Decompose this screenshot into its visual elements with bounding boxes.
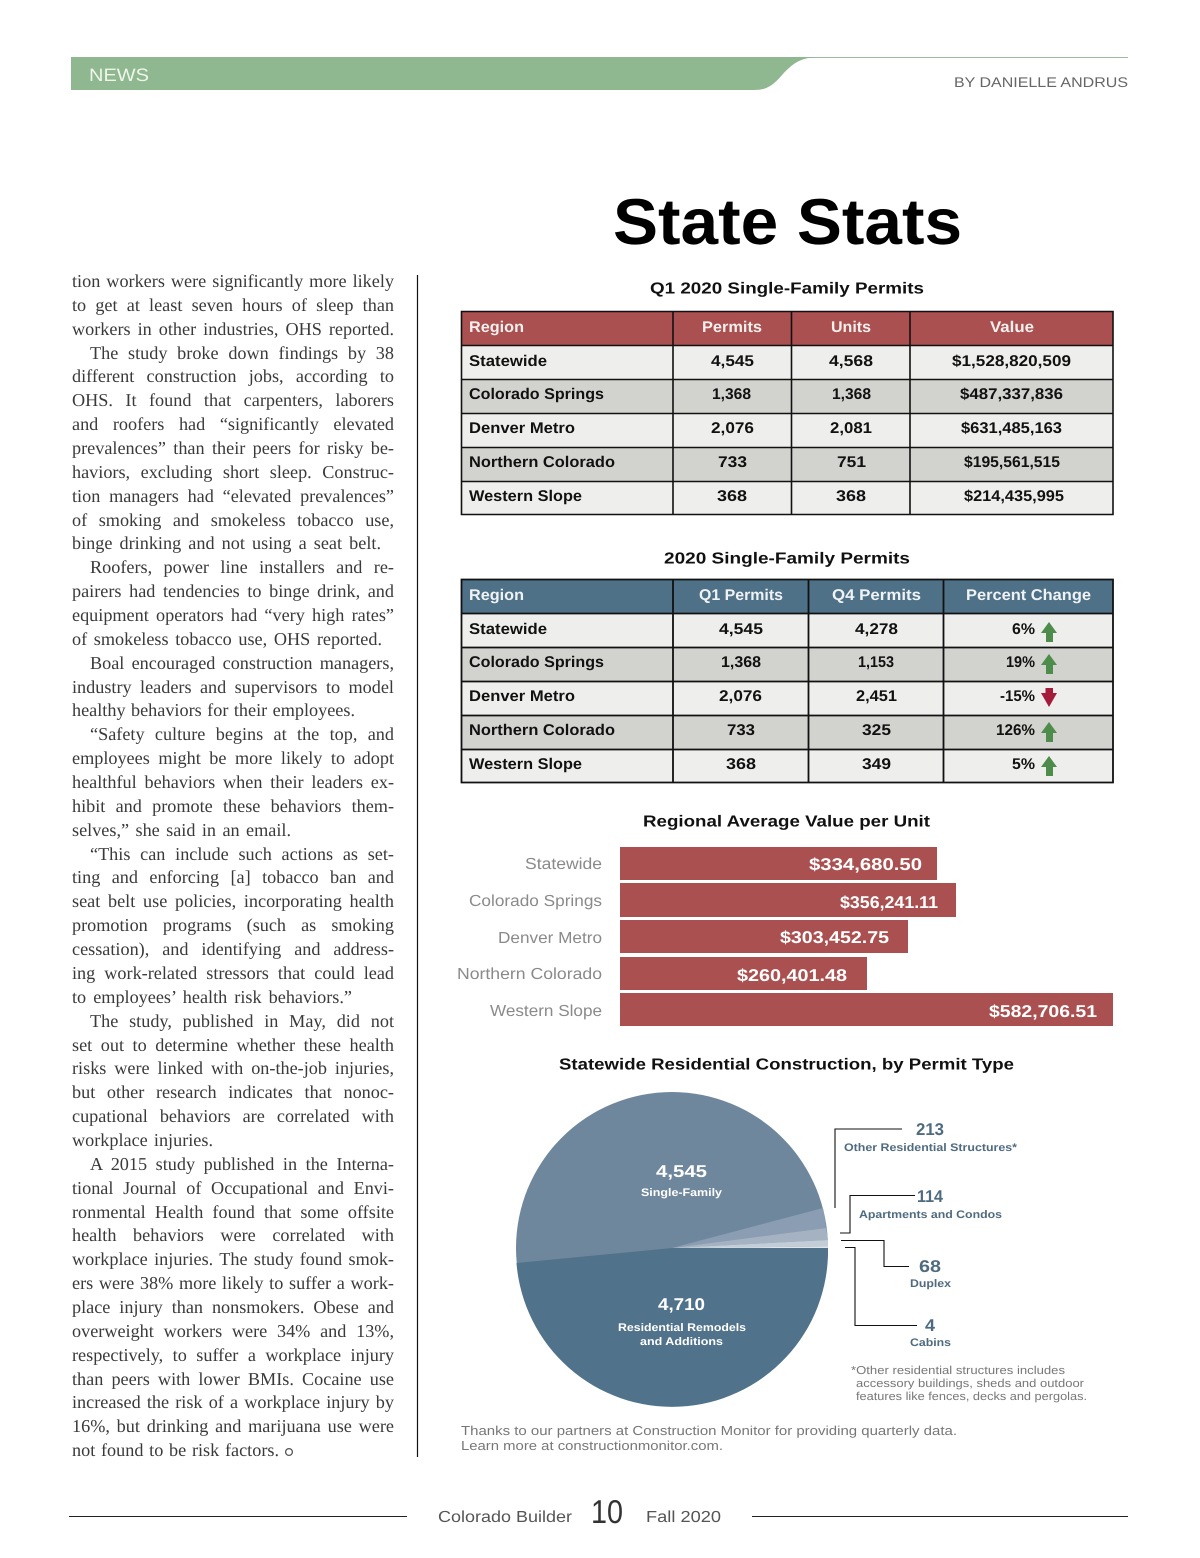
article text column: promotion programs (such as smoking xyxy=(72,915,394,935)
data rows: 4,545 xyxy=(719,621,763,638)
data rows: -15% xyxy=(1000,688,1035,705)
header row: Value xyxy=(990,319,1034,336)
data rows: Denver Metro xyxy=(469,420,575,437)
header row: Units xyxy=(831,319,871,336)
data rows: Western Slope xyxy=(469,488,582,505)
article text column: and roofers had “significantly elevated xyxy=(72,414,394,434)
bar chart: regional average value per unit xyxy=(457,814,1113,1026)
data rows xyxy=(469,353,1071,505)
data rows: 368 xyxy=(717,488,747,505)
callout: cabins: Cabins xyxy=(910,1337,951,1349)
callout: other residential structures: Other Residential Structures* xyxy=(844,1142,1018,1154)
table: Q1 2020 single-family permits xyxy=(461,280,1113,515)
data rows: 2,076 xyxy=(719,688,762,705)
data rows: 1,368 xyxy=(712,386,751,403)
callout: duplex xyxy=(841,1240,952,1290)
source note: Thanks to our partners at Construction Monitor for providing quarterly data. xyxy=(461,1423,957,1438)
article text column: employees might be more likely to adopt xyxy=(72,748,394,768)
data rows: $1,528,820,509 xyxy=(952,353,1071,370)
data rows: Colorado Springs xyxy=(469,654,604,671)
data rows: Denver Metro xyxy=(469,688,575,705)
header row: Region xyxy=(469,319,524,336)
article text column: cessation), and identifying and address- xyxy=(72,939,394,959)
article text column: equipment operators had “very high rates” xyxy=(72,605,394,625)
data rows: 2,081 xyxy=(830,420,872,437)
footnote xyxy=(851,1365,1087,1403)
label: single-family: Single-Family xyxy=(641,1187,723,1199)
article text column: workplace injuries. The study found smok- xyxy=(72,1249,394,1269)
data rows: 19% xyxy=(1006,654,1035,671)
byline: BY DANIELLE ANDRUS xyxy=(954,74,1128,90)
bar: Denver Metro: Denver Metro xyxy=(498,930,602,947)
callout: duplex: 68 xyxy=(919,1257,941,1276)
article text column: increased the risk of a workplace injury by xyxy=(72,1392,394,1412)
article text column: place injury than nonsmokers. Obese and xyxy=(72,1297,394,1317)
data rows: 733 xyxy=(718,454,747,471)
data rows: Northern Colorado xyxy=(469,454,615,471)
header band xyxy=(71,57,1128,90)
data rows: Colorado Springs xyxy=(469,386,604,403)
icon: up arrow, Statewide xyxy=(1041,622,1057,642)
icon: end-of-article mark xyxy=(286,1449,292,1455)
article text column: The study broke down findings by 38 xyxy=(90,343,394,363)
data rows: 4,278 xyxy=(855,621,898,638)
bar: Colorado Springs xyxy=(469,883,956,917)
article text column: Boal encouraged construction managers, xyxy=(90,653,394,673)
article text column: tion managers had “elevated prevalences” xyxy=(72,486,394,506)
article text column: not found to be risk factors. xyxy=(72,1440,279,1460)
data rows: $631,485,163 xyxy=(961,420,1062,437)
article text column: tional Journal of Occupational and Envi- xyxy=(72,1178,394,1198)
pie slices xyxy=(516,1092,828,1407)
section label: NEWS xyxy=(89,65,149,85)
article text column: industry leaders and supervisors to model xyxy=(72,677,394,697)
header row: Q4 Permits xyxy=(832,587,921,604)
callout: apartments and condos: Apartments and Condos xyxy=(859,1209,1002,1221)
data rows: Western Slope xyxy=(469,756,582,773)
data rows: 325 xyxy=(862,722,891,739)
article text column: to get at least seven hours of sleep than xyxy=(72,295,394,315)
callout: other residential structures xyxy=(835,1120,1018,1208)
callout: other residential structures: 213 xyxy=(916,1120,944,1139)
article text column: A 2015 study published in the Interna- xyxy=(90,1154,394,1174)
data rows: 1,368 xyxy=(721,654,761,671)
callout: duplex: Duplex xyxy=(910,1278,952,1290)
article text column: OHS. It found that carpenters, laborers xyxy=(72,390,394,410)
data rows: 4,568 xyxy=(829,353,873,370)
article text column: different construction jobs, according to xyxy=(72,366,394,386)
page footer: 10 xyxy=(591,1493,623,1530)
data rows: $487,337,836 xyxy=(960,386,1063,403)
bar: Western Slope: $582,706.51 xyxy=(989,1002,1097,1021)
header row: Permits xyxy=(702,319,762,336)
article text column: binge drinking and not using a seat belt. xyxy=(72,533,381,553)
article text column: but other research indicates that nonoc- xyxy=(72,1082,394,1102)
article text column: The study, published in May, did not xyxy=(90,1011,394,1031)
article text column: haviors, excluding short sleep. Construc- xyxy=(72,462,394,482)
data rows: 4,545 xyxy=(711,353,754,370)
article text column: selves,” she said in an email. xyxy=(72,820,291,840)
data rows: $214,435,995 xyxy=(964,488,1064,505)
article text column: workplace injuries. xyxy=(72,1130,213,1150)
article text column: ers were 38% more likely to suffer a work- xyxy=(72,1273,394,1293)
chart heading: Statewide Residential Construction, by Permit Type xyxy=(559,1056,1014,1074)
article text column: than peers with lower BMIs. Cocaine use xyxy=(72,1369,394,1389)
table heading: Q1 2020 Single-Family Permits xyxy=(650,280,924,298)
data rows: Northern Colorado xyxy=(469,722,615,739)
footnote: accessory buildings, sheds and outdoor xyxy=(856,1378,1084,1390)
header row: Region xyxy=(469,587,524,604)
data rows: 1,153 xyxy=(858,654,894,671)
article text column: prevalences” than their peers for risky be- xyxy=(72,438,394,458)
label: single-family: 4,545 xyxy=(656,1162,707,1181)
bar: Colorado Springs: $356,241.11 xyxy=(840,893,938,912)
icon: up arrow, Northern Colorado xyxy=(1041,722,1057,742)
article text column: healthful behaviors when their leaders ex- xyxy=(72,772,394,792)
article text column: ing work-related stressors that could lead xyxy=(72,963,394,983)
footnote: features like fences, decks and pergolas. xyxy=(856,1391,1087,1403)
callout: apartments and condos: 114 xyxy=(917,1187,944,1206)
callout: cabins: 4 xyxy=(925,1316,936,1335)
article text column: cupational behaviors are correlated with xyxy=(72,1106,394,1126)
icon: up arrow, Colorado Springs xyxy=(1041,654,1057,674)
article text column: Roofers, power line installers and re- xyxy=(90,557,394,577)
data rows: 349 xyxy=(862,756,891,773)
data rows xyxy=(469,621,1035,773)
bar: Statewide xyxy=(525,847,937,880)
label: residential remodels: Residential Remodels xyxy=(618,1322,746,1334)
page footer: Fall 2020 xyxy=(646,1509,721,1526)
data rows: 751 xyxy=(837,454,866,471)
column divider xyxy=(416,275,418,1457)
bar: Western Slope xyxy=(490,993,1113,1026)
label: residential remodels xyxy=(618,1295,746,1348)
data rows: 126% xyxy=(996,722,1035,739)
label: single-family xyxy=(641,1162,723,1199)
icon: up arrow, Western Slope xyxy=(1041,756,1057,776)
table: 2020 single-family permits xyxy=(461,550,1113,783)
bar: Northern Colorado: $260,401.48 xyxy=(737,966,847,985)
footnote: *Other residential structures includes xyxy=(851,1365,1065,1377)
title: State Stats xyxy=(613,185,962,258)
article text column: overweight workers were 34% and 13%, xyxy=(72,1321,394,1341)
header row xyxy=(469,319,1034,336)
bar: Statewide: $334,680.50 xyxy=(809,855,922,874)
bar: Western Slope: Western Slope xyxy=(490,1003,602,1020)
bar: Denver Metro: $303,452.75 xyxy=(780,928,889,947)
article text column: health behaviors were correlated with xyxy=(72,1225,394,1245)
article text column: ronmental Health found that some offsite xyxy=(72,1202,394,1222)
data rows: Statewide xyxy=(469,353,547,370)
bar: Northern Colorado xyxy=(457,957,867,990)
bar: Statewide: Statewide xyxy=(525,856,602,873)
data rows: $195,561,515 xyxy=(964,454,1060,471)
article text column xyxy=(72,271,394,1460)
table heading: 2020 Single-Family Permits xyxy=(664,550,910,568)
article text column: “This can include such actions as set- xyxy=(90,844,394,864)
bar: Denver Metro xyxy=(498,920,908,953)
article text column: respectively, to suffer a workplace injury xyxy=(72,1345,394,1365)
article text column: pairers had tendencies to binge drink, and xyxy=(72,581,394,601)
data rows: 368 xyxy=(836,488,866,505)
article text column: tion workers were significantly more likely xyxy=(72,271,394,291)
article text column: set out to determine whether these health xyxy=(72,1034,394,1054)
callout: cabins xyxy=(845,1248,951,1349)
data rows: 5% xyxy=(1012,756,1035,773)
pie chart: residential construction by permit type xyxy=(516,1056,1087,1407)
page footer: Colorado Builder xyxy=(438,1509,573,1526)
article text column: “Safety culture begins at the top, and xyxy=(90,724,394,744)
article text column: of smoking and smokeless tobacco use, xyxy=(72,510,394,530)
bar: Northern Colorado: Northern Colorado xyxy=(457,966,602,983)
article text column: hibit and promote these behaviors them- xyxy=(72,796,394,816)
data rows: 2,076 xyxy=(711,420,754,437)
article text column: seat belt use policies, incorporating health xyxy=(72,891,394,911)
data rows: Statewide xyxy=(469,621,547,638)
article text column: risks were linked with on-the-job injuries, xyxy=(72,1058,394,1078)
data rows: 368 xyxy=(726,756,756,773)
label: residential remodels: and Additions xyxy=(640,1336,723,1348)
article text column: 16%, but drinking and marijuana use were xyxy=(72,1416,394,1436)
article text column: of smokeless tobacco use, OHS reported. xyxy=(72,629,382,649)
header row xyxy=(469,587,1091,604)
chart heading: Regional Average Value per Unit xyxy=(643,814,931,830)
data rows: 2,451 xyxy=(856,688,897,705)
article text column: ting and enforcing [a] tobacco ban and xyxy=(72,867,394,887)
icon: down arrow, Denver Metro xyxy=(1041,688,1057,707)
article text column: healthy behaviors for their employees. xyxy=(72,700,355,720)
header row: Q1 Permits xyxy=(699,587,783,604)
source note xyxy=(461,1423,957,1453)
data rows: 6% xyxy=(1012,621,1035,638)
bar: Colorado Springs: Colorado Springs xyxy=(469,893,602,910)
callout: apartments and condos xyxy=(840,1187,1002,1233)
source note: Learn more at constructionmonitor.com. xyxy=(461,1438,723,1453)
page footer xyxy=(69,1493,1128,1530)
data rows: 1,368 xyxy=(832,386,871,403)
header row: Percent Change xyxy=(966,587,1091,604)
label: residential remodels: 4,710 xyxy=(658,1295,705,1314)
data rows: 733 xyxy=(727,722,755,739)
article text column: workers in other industries, OHS reported. xyxy=(72,319,394,339)
article text column: to employees’ health risk behaviors.” xyxy=(72,987,352,1007)
